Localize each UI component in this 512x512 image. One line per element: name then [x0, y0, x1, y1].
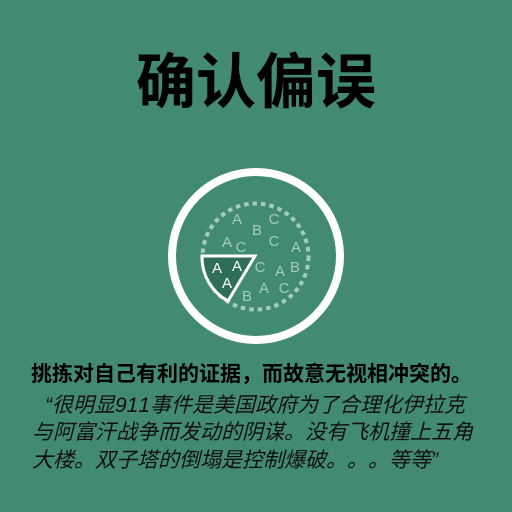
scattered letters: C	[255, 259, 266, 276]
scattered letters	[222, 211, 301, 305]
italic example quote: “很明显911事件是美国政府为了合理化伊拉克	[45, 394, 465, 417]
scattered letters: C	[279, 280, 290, 297]
outer ring	[172, 172, 340, 340]
scattered letters: A	[275, 263, 285, 280]
scattered letters: C	[269, 233, 280, 250]
dotted circle	[202, 204, 308, 310]
title: 确认偏误	[136, 49, 376, 116]
scattered letters: C	[269, 211, 280, 228]
italic example quote: 与阿富汗战争而发动的阴谋。没有飞机撞上五角	[32, 421, 473, 444]
scattered letters: A	[259, 280, 269, 297]
scattered letters: A	[222, 234, 232, 251]
scattered letters: A	[232, 211, 242, 228]
selected wedge: A	[222, 275, 232, 292]
scattered letters: B	[242, 288, 252, 305]
bold statement: 挑拣对自己有利的证据，而故意无视相冲突的。	[31, 363, 472, 386]
selected wedge: A	[212, 260, 222, 277]
selected wedge	[202, 256, 255, 301]
italic example quote	[32, 394, 474, 472]
scattered letters: C	[236, 239, 247, 256]
scattered letters: B	[252, 222, 262, 239]
selected wedge: A	[232, 258, 242, 275]
scattered letters: B	[290, 259, 300, 276]
scattered letters: A	[291, 239, 301, 256]
italic example quote: 大楼。双子塔的倒塌是控制爆破。。。等等”	[32, 449, 438, 472]
